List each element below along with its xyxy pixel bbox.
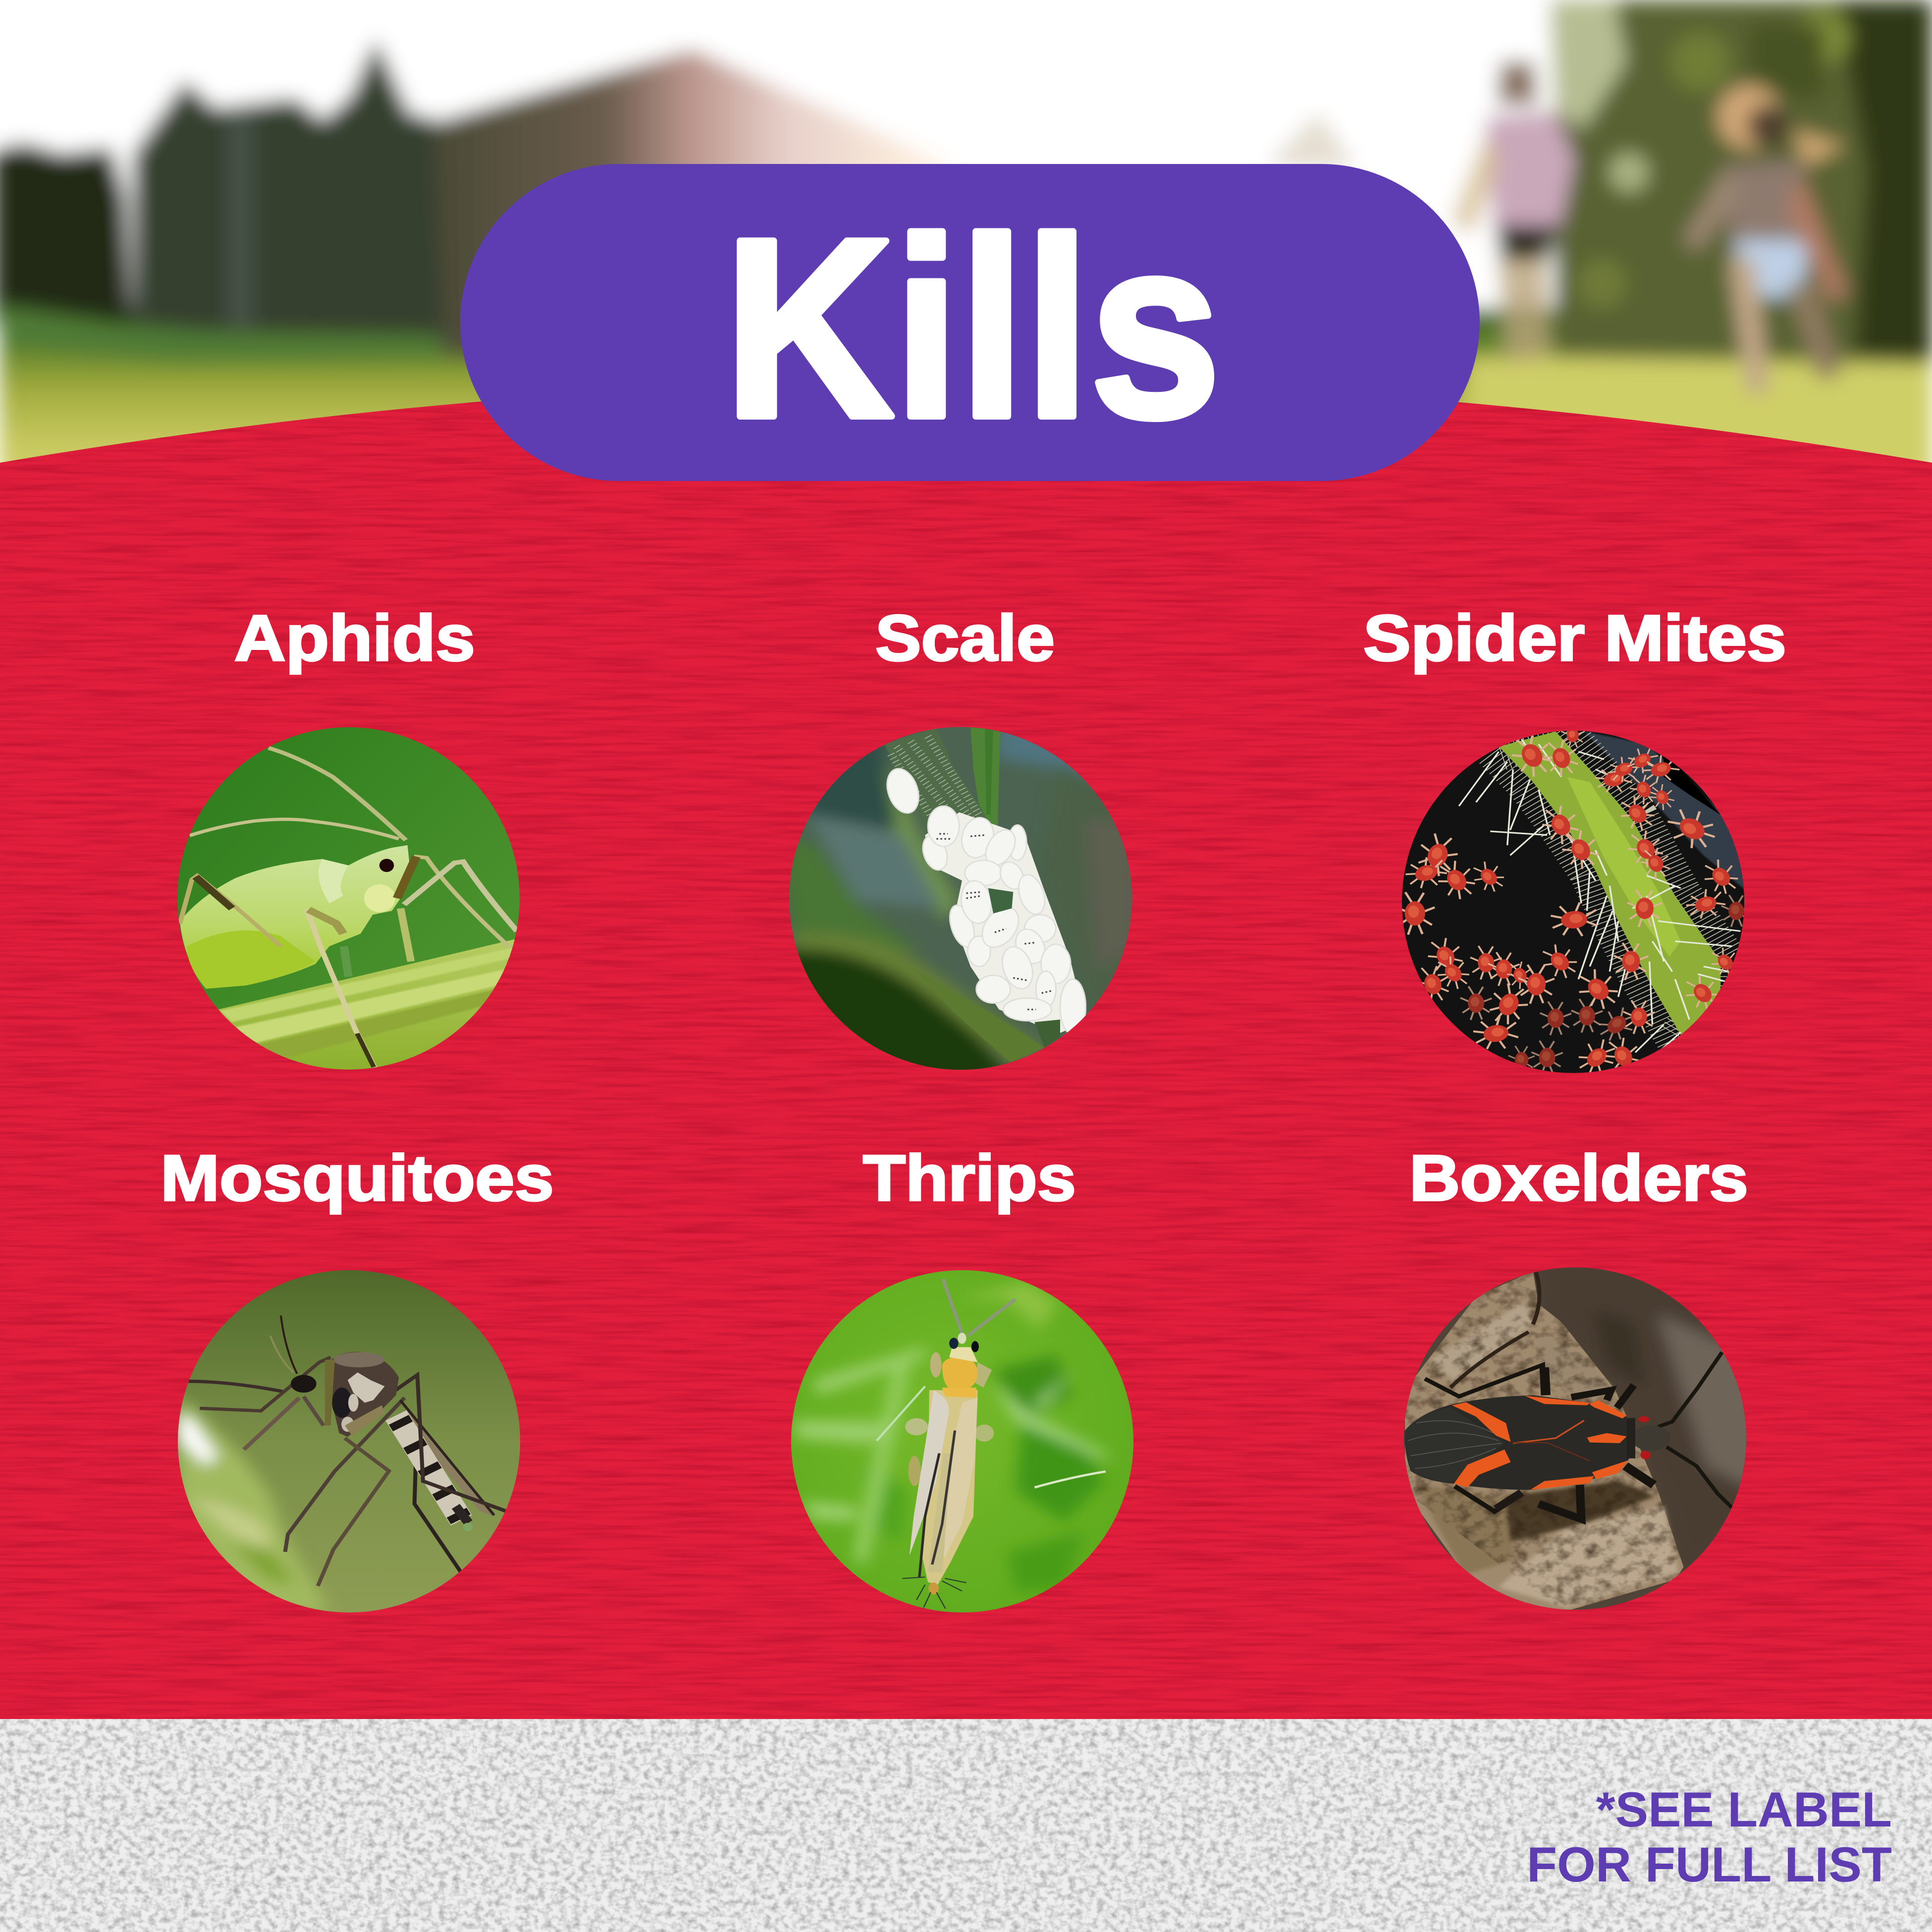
footnote: see label for full list: FOR FULL LIST	[1527, 1837, 1892, 1892]
photo: mosquito	[173, 1266, 525, 1617]
label: Boxelders: Boxelders	[1409, 1141, 1748, 1214]
photo: aphid on stem	[177, 727, 520, 1070]
background photo: children running on lawn	[0, 0, 1932, 495]
panel: Spider Mites	[1363, 601, 1786, 1080]
panel: Thrips	[788, 1141, 1139, 1617]
label: Spider Mites: Spider Mites	[1363, 601, 1786, 674]
heading: Kills: Kills	[724, 186, 1221, 470]
panel: Aphids	[168, 601, 530, 1080]
panel: Mosquitoes	[161, 1141, 554, 1617]
grey plaster footer band	[0, 1719, 1932, 1932]
label: Scale: Scale	[875, 601, 1055, 674]
heading pill	[460, 164, 1480, 481]
panel: Scale	[771, 601, 1141, 1088]
panel: Boxelders	[1399, 1141, 1761, 1615]
label: Aphids: Aphids	[234, 601, 475, 674]
footnote: see label for full list: *SEE LABEL	[1596, 1782, 1892, 1837]
label: Thrips: Thrips	[863, 1141, 1076, 1214]
photo: boxelder bug on bark	[1399, 1263, 1761, 1615]
photo: red spider mites on green stem	[1395, 723, 1751, 1080]
label: Mosquitoes: Mosquitoes	[161, 1141, 554, 1214]
red painted wood panel	[0, 297, 1932, 1734]
photo: white scale insects on stem	[771, 718, 1141, 1088]
photo: thrips on leaf	[788, 1266, 1139, 1617]
footnote: see label for full list	[1527, 1782, 1892, 1892]
